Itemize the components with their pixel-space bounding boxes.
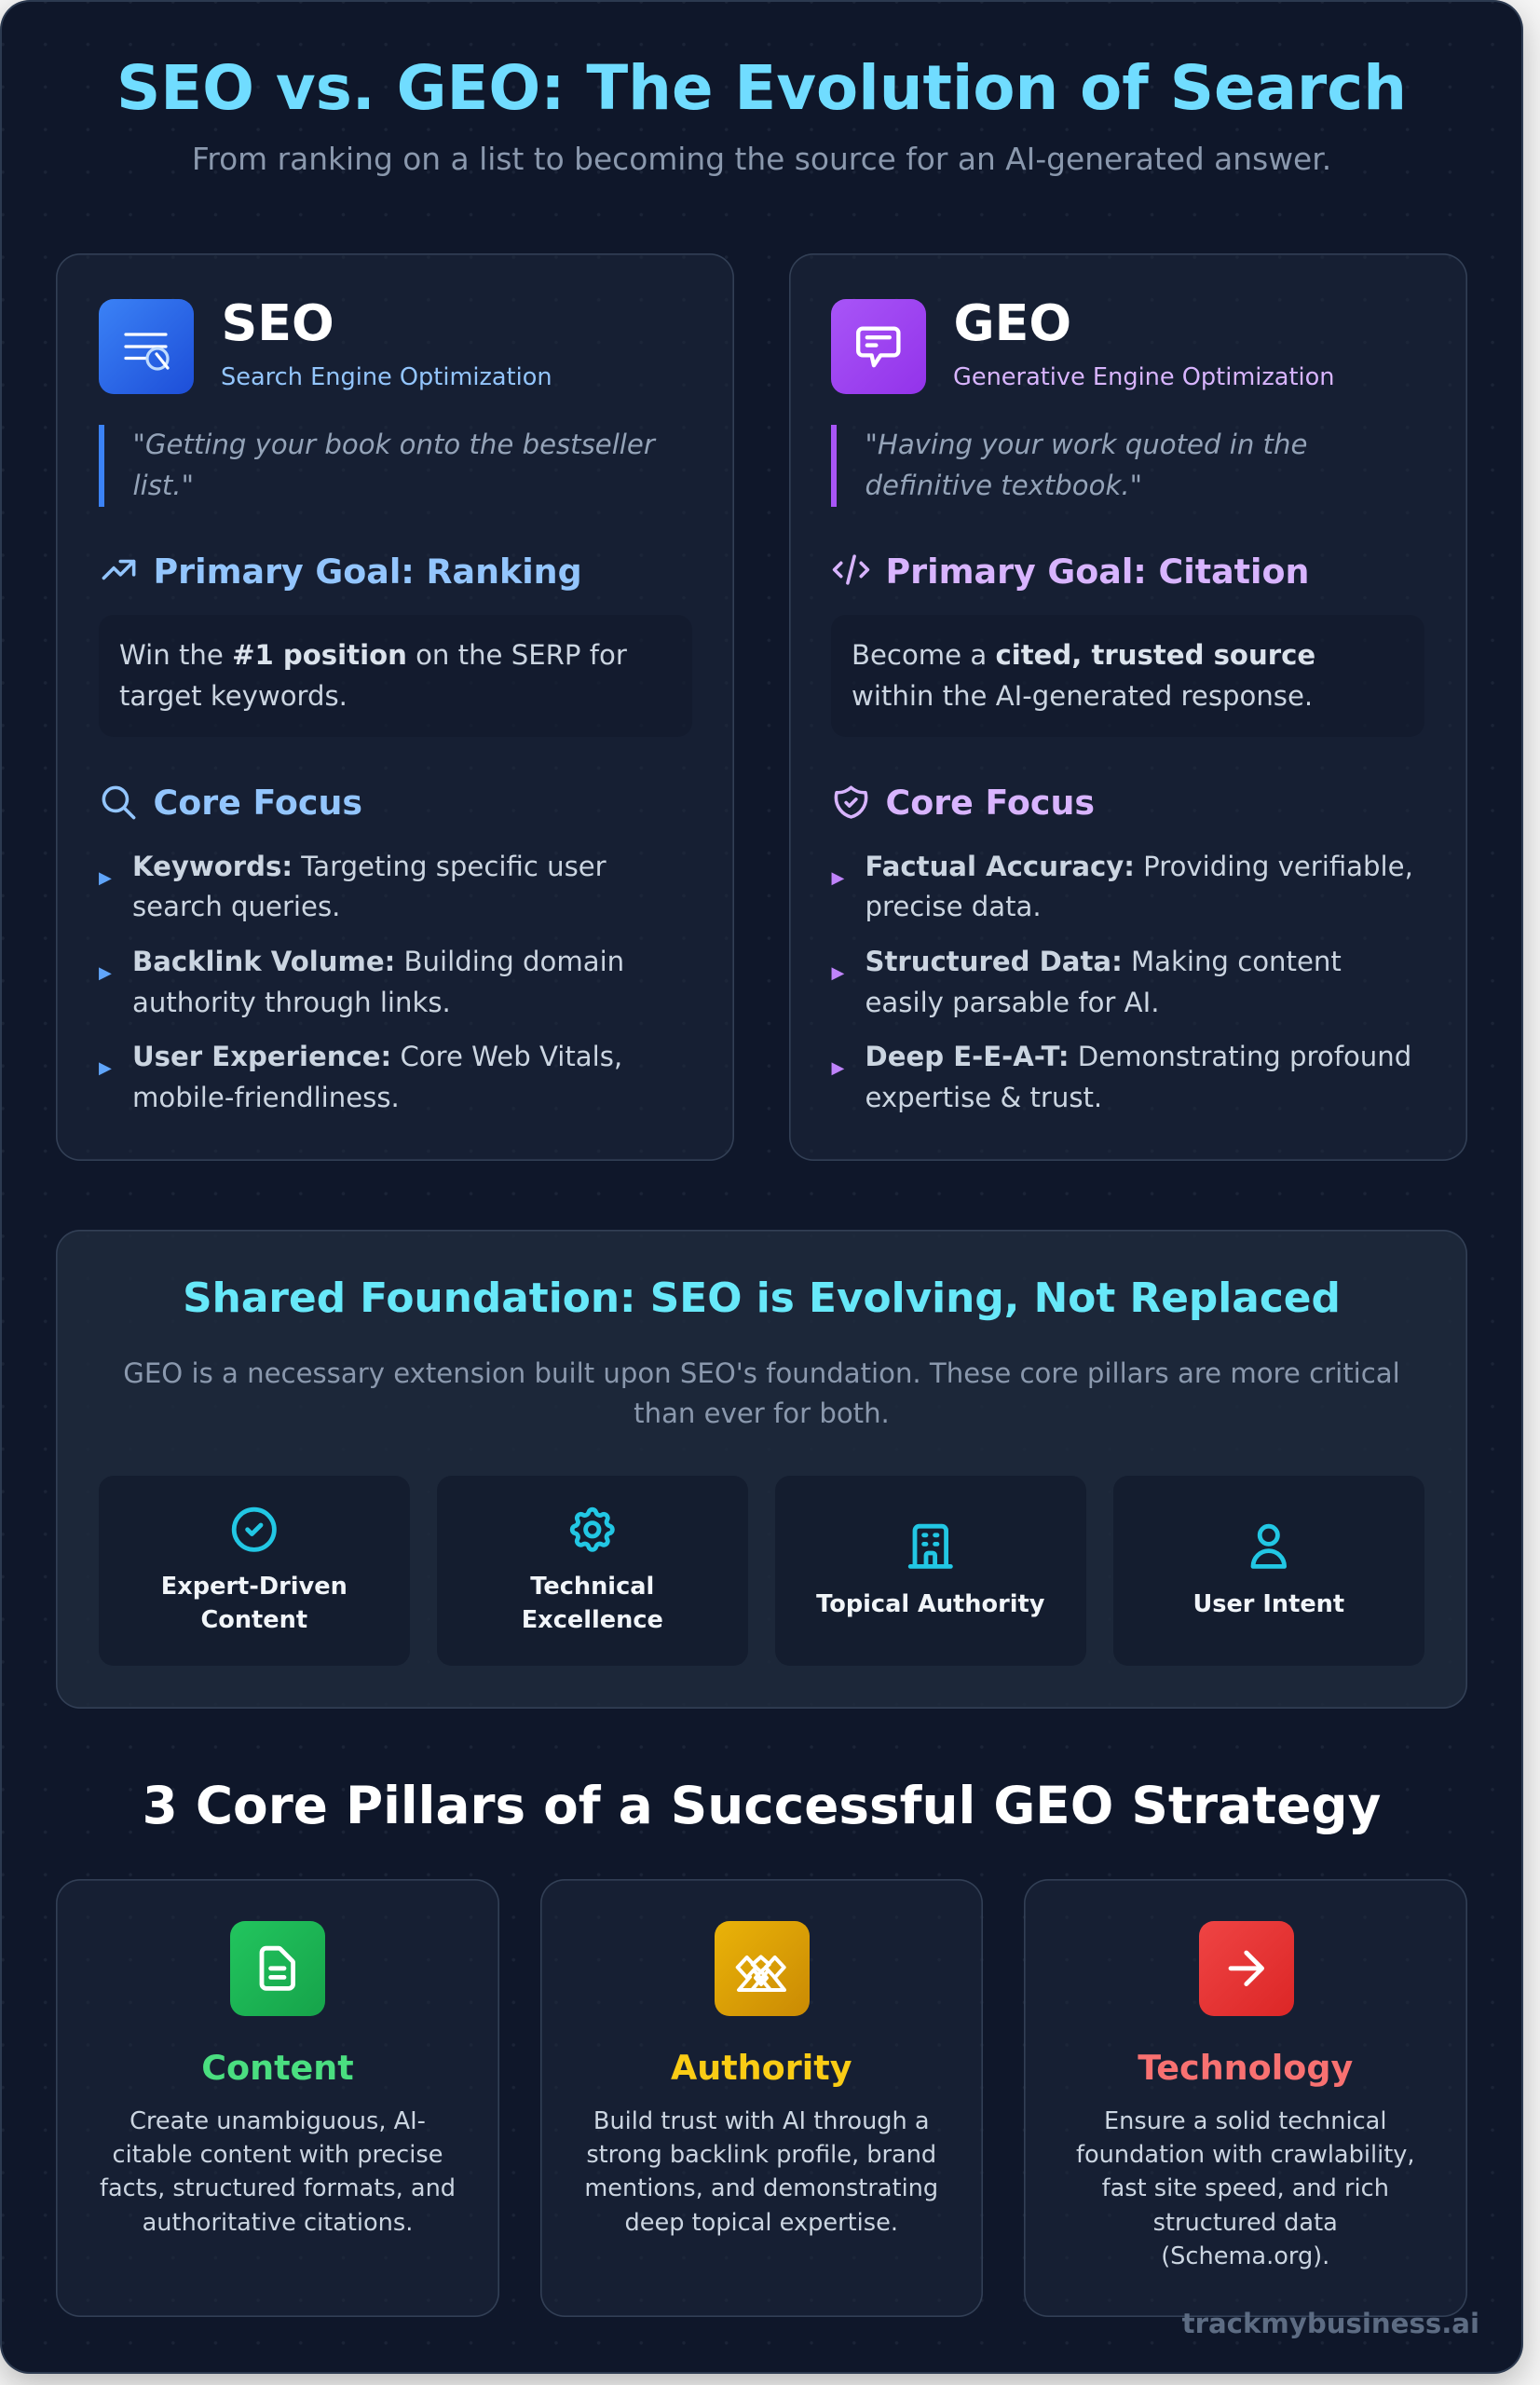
quote: definitive textbook	[831, 425, 1307, 507]
bullet list: GEO focus: ▶	[831, 868, 844, 887]
bullet list: SEO focus: ▶	[99, 868, 112, 887]
quote: definitive textbook: definitive textbook."	[865, 470, 1142, 501]
description: structured data	[1153, 2209, 1338, 2237]
heading: content: Content	[201, 2048, 354, 2088]
quote: bestseller list: list."	[132, 470, 194, 501]
title: SEO vs. GEO: The Evolution of Search	[116, 53, 1407, 124]
icon: GEO chat bubble	[831, 299, 926, 394]
description: authoritative citations.	[143, 2209, 413, 2237]
description: strong backlink profile, brand	[586, 2141, 936, 2169]
bullet list: SEO focus: mobile-friendliness.	[132, 1081, 400, 1112]
bullet list: SEO focus: authority through links.	[132, 986, 451, 1017]
panel: GEO	[789, 253, 1467, 1161]
icon: check circle	[231, 1507, 277, 1552]
quote: bestseller list	[99, 425, 655, 507]
icon: SEO list search	[99, 299, 194, 394]
description: deep topical expertise.	[624, 2209, 898, 2237]
description: fast site speed, and rich	[1102, 2174, 1389, 2202]
goal text: Become a cited, trusted source	[852, 639, 1315, 671]
bullet list: SEO focus: search queries.	[132, 891, 340, 922]
label	[522, 1573, 663, 1634]
icon: arrow right	[1198, 1921, 1293, 2016]
panel: content pillar	[56, 1879, 499, 2317]
description: Ensure a solid technical	[1104, 2107, 1386, 2135]
bullet list: GEO focus: Deep E-E-A-T: Demonstrating profound	[865, 1041, 1411, 1072]
description	[1076, 2107, 1415, 2270]
description	[584, 2107, 938, 2237]
list item: structured data	[831, 946, 1342, 1017]
heading: technology: Technology	[1138, 2048, 1353, 2088]
bullet list: SEO focus	[99, 850, 624, 1112]
label: Expert-Driven	[161, 1573, 348, 1601]
description: citable content with precise	[113, 2141, 443, 2169]
description	[100, 2107, 456, 2237]
description: GEO is a necessary extension built upon SEO's foundation. These core pillars are more critical	[123, 1356, 1400, 1388]
list item: user experience	[99, 1041, 622, 1112]
bullet list: SEO focus: Keywords: Targeting specific user	[132, 850, 606, 881]
icon: shield check	[835, 785, 868, 819]
bullet list: GEO focus: easily parsable for AI.	[865, 986, 1159, 1017]
description: Create unambiguous, AI-	[129, 2107, 426, 2135]
icon: gear	[570, 1507, 615, 1552]
list item: deep E-E-A-T	[831, 1041, 1411, 1112]
icon: authority diamonds	[714, 1921, 809, 2016]
panel: shared foundation	[56, 1230, 1467, 1709]
bullet list: GEO focus: ▶	[831, 1058, 844, 1078]
bullet list: GEO focus	[831, 850, 1413, 1112]
description	[123, 1356, 1400, 1429]
bullet list: GEO focus: Factual Accuracy: Providing verifiable,	[865, 850, 1413, 881]
label: Excellence	[522, 1606, 663, 1634]
heading: primary goal ranking: Primary Goal: Ranking	[153, 552, 582, 592]
goal text	[852, 639, 1315, 712]
heading: GEO: GEO	[954, 293, 1071, 352]
description: than ever for both.	[634, 1397, 890, 1429]
label: User Intent	[1192, 1590, 1344, 1618]
pillar card: topical authority	[775, 1476, 1086, 1666]
label	[161, 1573, 348, 1634]
bullet list: GEO focus: expertise & trust.	[865, 1081, 1102, 1112]
icon: code	[833, 554, 870, 585]
goal box	[831, 615, 1424, 737]
subtitle: From ranking on a list to becoming the source for an AI-generated answer.	[192, 142, 1331, 177]
watermark: trackmybusiness.ai	[1182, 2308, 1479, 2339]
panel: SEO	[56, 253, 734, 1161]
icon: search	[102, 786, 136, 820]
goal text: within the AI-generated response.	[852, 680, 1313, 712]
description: mentions, and demonstrating	[584, 2174, 938, 2202]
description: Build trust with AI through a	[593, 2107, 930, 2135]
label: Topical Authority	[816, 1590, 1044, 1618]
goal box	[99, 615, 692, 737]
goal text: Win the #1 position on the SERP for	[119, 639, 627, 671]
heading: shared foundation: Shared Foundation: SEO is Evolving, Not Replaced	[183, 1274, 1341, 1322]
section heading: core pillars: 3 Core Pillars of a Successful GEO Strategy	[143, 1776, 1381, 1835]
heading: SEO: SEO	[222, 293, 334, 352]
bullet list: GEO focus: precise data.	[865, 891, 1042, 922]
quote: definitive textbook: "Having your work quoted in the	[865, 429, 1307, 460]
heading: authority: Authority	[671, 2048, 852, 2088]
description: (Schema.org).	[1161, 2242, 1329, 2270]
list item: backlink volume	[99, 946, 624, 1017]
bullet list: GEO focus: Structured Data: Making content	[865, 946, 1342, 977]
subheading: Generative Engine Optimization: Generative Engine Optimization	[953, 363, 1334, 391]
heading: core focus: Core Focus	[153, 783, 362, 823]
heading: core focus: Core Focus	[885, 783, 1095, 823]
description: facts, structured formats, and	[100, 2174, 456, 2202]
icon: building	[907, 1524, 953, 1569]
bullet list: GEO focus: ▶	[831, 963, 844, 983]
pillar card: expert-driven content	[99, 1476, 410, 1666]
description: foundation with crawlability,	[1076, 2141, 1415, 2169]
bullet list: SEO focus: ▶	[99, 963, 112, 983]
quote: bestseller list: "Getting your book onto the bestseller	[132, 429, 655, 460]
pillar card: technical excellence	[437, 1476, 748, 1666]
goal text: target keywords.	[119, 680, 348, 712]
bullet list: SEO focus: Backlink Volume: Building domain	[132, 946, 624, 977]
list item: factual accuracy	[831, 850, 1413, 922]
icon: document	[229, 1921, 324, 2016]
panel: authority pillar	[540, 1879, 982, 2317]
heading: primary goal citation: Primary Goal: Citation	[885, 552, 1309, 592]
icon: user	[1250, 1524, 1287, 1569]
icon: trending up	[102, 559, 136, 579]
panel: technology pillar	[1024, 1879, 1466, 2317]
bullet list: SEO focus: ▶	[99, 1058, 112, 1078]
label: Technical	[530, 1573, 654, 1601]
goal text	[119, 639, 627, 712]
pillar card: user intent	[1113, 1476, 1424, 1666]
subheading: Search Engine Optimization: Search Engine Optimization	[221, 363, 552, 391]
label: Content	[200, 1606, 307, 1634]
list item: keywords	[99, 850, 606, 922]
bullet list: SEO focus: User Experience: Core Web Vitals,	[132, 1041, 622, 1072]
